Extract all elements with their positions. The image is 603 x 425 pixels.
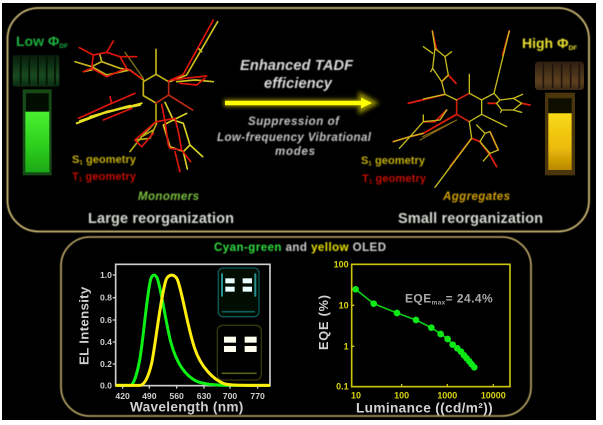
axis labels and ticks: 770 xyxy=(250,391,265,401)
icon: green emitting vial xyxy=(13,55,59,175)
S1 geometry lines xyxy=(393,31,523,187)
text: suppression of low-frequency vibrational modes: Suppression of xyxy=(248,116,340,128)
axis labels and ticks: 0.6 xyxy=(100,315,112,325)
S1 geometry lines xyxy=(75,22,218,169)
molecule: monomer S1 and T1 geometries xyxy=(75,20,218,172)
axis labels and ticks: 1.0 xyxy=(100,270,112,280)
text: suppression of low-frequency vibrational modes: Low-frequency Vibrational xyxy=(217,132,372,144)
legend label: T1 geometry right: geometry xyxy=(372,173,427,185)
axis labels and ticks: 630 xyxy=(197,391,211,401)
axis labels and ticks: 0.2 xyxy=(100,359,112,369)
data series: EQE green line and markers xyxy=(352,286,478,371)
ticks and axis numbers xyxy=(334,259,506,401)
heading: Enhanced TADF efficiency xyxy=(240,58,354,92)
label: Aggregates: Aggregates xyxy=(442,191,510,203)
legend label: T1 geometry right: 1 xyxy=(369,180,373,186)
annotation: maximum EQE: = 24.4% xyxy=(446,291,493,305)
legend label: T1 geometry: 1 xyxy=(79,178,83,184)
axis labels and ticks xyxy=(77,270,265,415)
ticks and axis numbers: 100 xyxy=(334,259,349,269)
text: suppression of low-frequency vibrational modes: modes xyxy=(275,146,315,158)
ticks and axis numbers: 1000 xyxy=(437,391,457,401)
axis labels and ticks: 700 xyxy=(223,391,237,401)
legend label: T1 geometry right: T xyxy=(362,173,369,185)
axis labels and ticks: 560 xyxy=(169,391,184,401)
y axis title: EQE: EQE (%) xyxy=(317,295,331,350)
ticks and axis numbers: 10 xyxy=(339,300,349,310)
annotation: maximum EQE: max xyxy=(432,299,446,306)
device photo: cyan-green OLED xyxy=(218,268,259,317)
legend label: T1 geometry: T xyxy=(72,171,79,183)
ticks and axis numbers: 0.1 xyxy=(336,382,349,392)
chart: EQE versus luminance xyxy=(317,259,510,416)
x axis title: Wavelength: Wavelength (nm) xyxy=(130,400,243,415)
curve: green EL spectrum xyxy=(116,275,270,385)
legend: left geometries xyxy=(72,154,137,184)
heading: Enhanced TADF efficiency: efficiency xyxy=(264,76,333,92)
panel outline: bottom xyxy=(61,237,531,416)
panel: OLED device performance xyxy=(61,237,531,416)
axis labels and ticks: 490 xyxy=(142,391,157,401)
label: High quantum yield: High Φ xyxy=(522,35,568,51)
text: suppression of low-frequency vibrational modes xyxy=(217,116,372,158)
device photo: yellow OLED xyxy=(217,325,261,380)
T1 geometry lines xyxy=(78,20,213,172)
caption: Small reorganization: Small reorganization xyxy=(398,211,543,227)
annotation: maximum EQE: EQE xyxy=(405,291,431,305)
arrow: yellow glowing arrow xyxy=(224,98,372,108)
parallel dim ring edge xyxy=(420,120,457,140)
panel: top TADF comparison xyxy=(8,8,589,232)
axis labels and ticks: 420 xyxy=(115,391,130,401)
legend label: S1 geometry: geometry xyxy=(83,154,137,166)
axis labels and ticks: 0.4 xyxy=(100,337,112,347)
axis labels and ticks: 0.0 xyxy=(100,381,112,391)
legend label: S1 geometry: S xyxy=(72,154,79,166)
ticks and axis numbers: 10 xyxy=(351,391,361,401)
legend: right geometries xyxy=(361,155,427,186)
legend label: S1 geometry: 1 xyxy=(79,160,83,166)
legend label: S1 geometry right: S xyxy=(361,155,368,167)
legend label: S1 geometry right: geometry xyxy=(372,155,426,167)
plot frame xyxy=(352,264,510,387)
T1 geometry lines xyxy=(393,31,530,167)
ticks and axis numbers: 100 xyxy=(394,391,409,401)
icon: yellow emitting vial xyxy=(535,62,584,175)
label: Low quantum yield: Low Φ xyxy=(16,33,59,49)
label: Monomers: Monomers xyxy=(138,191,199,203)
molecule: aggregate S1 and T1 geometries xyxy=(393,31,530,187)
label: Low quantum yield: DF xyxy=(59,43,68,50)
caption: Large reorganization: Large reorganization xyxy=(88,211,234,227)
heading: Cyan-green and yellow OLED: Cyan-green and yellow OLED xyxy=(214,242,386,254)
ticks and axis numbers: 1 xyxy=(344,341,349,351)
legend label: S1 geometry right: 1 xyxy=(368,162,372,168)
chart: EL spectra xyxy=(77,264,270,415)
label: High quantum yield: DF xyxy=(568,45,577,52)
ticks and axis numbers: 10000 xyxy=(481,391,506,401)
panel outline: top xyxy=(8,8,589,232)
plot frame xyxy=(116,264,270,386)
axis labels and ticks: 0.8 xyxy=(100,293,112,303)
curve: yellow EL spectrum xyxy=(116,275,270,385)
heading: Enhanced TADF efficiency: Enhanced TADF xyxy=(240,58,354,74)
legend label: T1 geometry: geometry xyxy=(82,171,137,183)
x axis title: Luminance: Luminance ((cd/m²)) xyxy=(356,401,493,416)
y axis title: EL Intensity: EL Intensity xyxy=(77,286,92,365)
